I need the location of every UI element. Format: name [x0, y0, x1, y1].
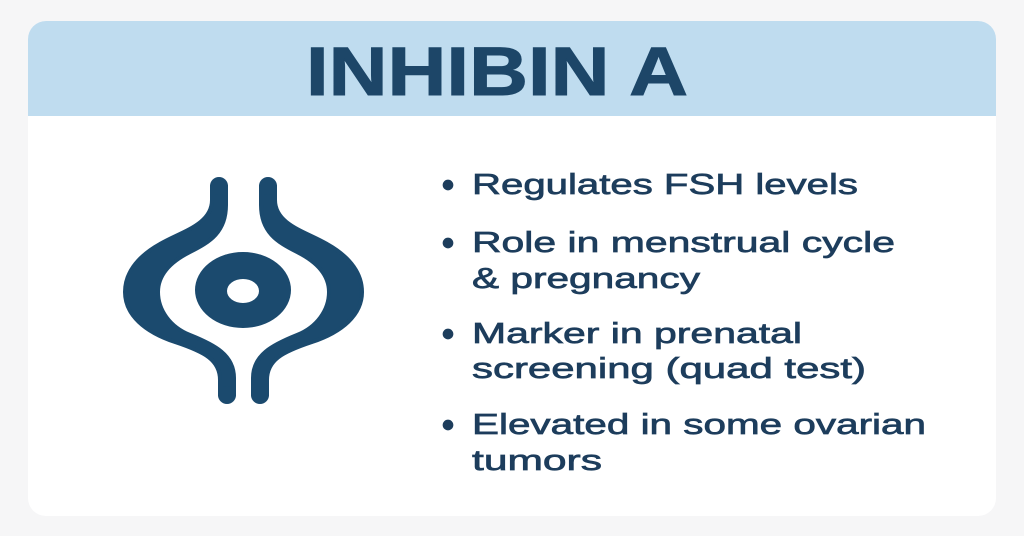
bullet 2: & pregnancy — [472, 263, 701, 295]
bullet 1 — [443, 169, 858, 201]
title: INHIBIN A — [306, 33, 688, 110]
bullet 3: screening (quad test) — [472, 353, 866, 385]
bullet list — [443, 169, 926, 477]
bullet 2: Role in menstrual cycle — [472, 227, 895, 259]
bullet 4 — [443, 409, 926, 477]
bullet 4: Elevated in some ovarian — [472, 409, 926, 441]
bullet 3 — [443, 318, 866, 385]
bullet 4: tumors — [472, 445, 602, 477]
header band — [28, 21, 996, 116]
bullet 3: Marker in prenatal — [472, 318, 802, 350]
icon: inhibin symbol — [125, 177, 362, 404]
bullet 2 — [443, 227, 895, 295]
bullet 1: Regulates FSH levels — [472, 169, 858, 201]
